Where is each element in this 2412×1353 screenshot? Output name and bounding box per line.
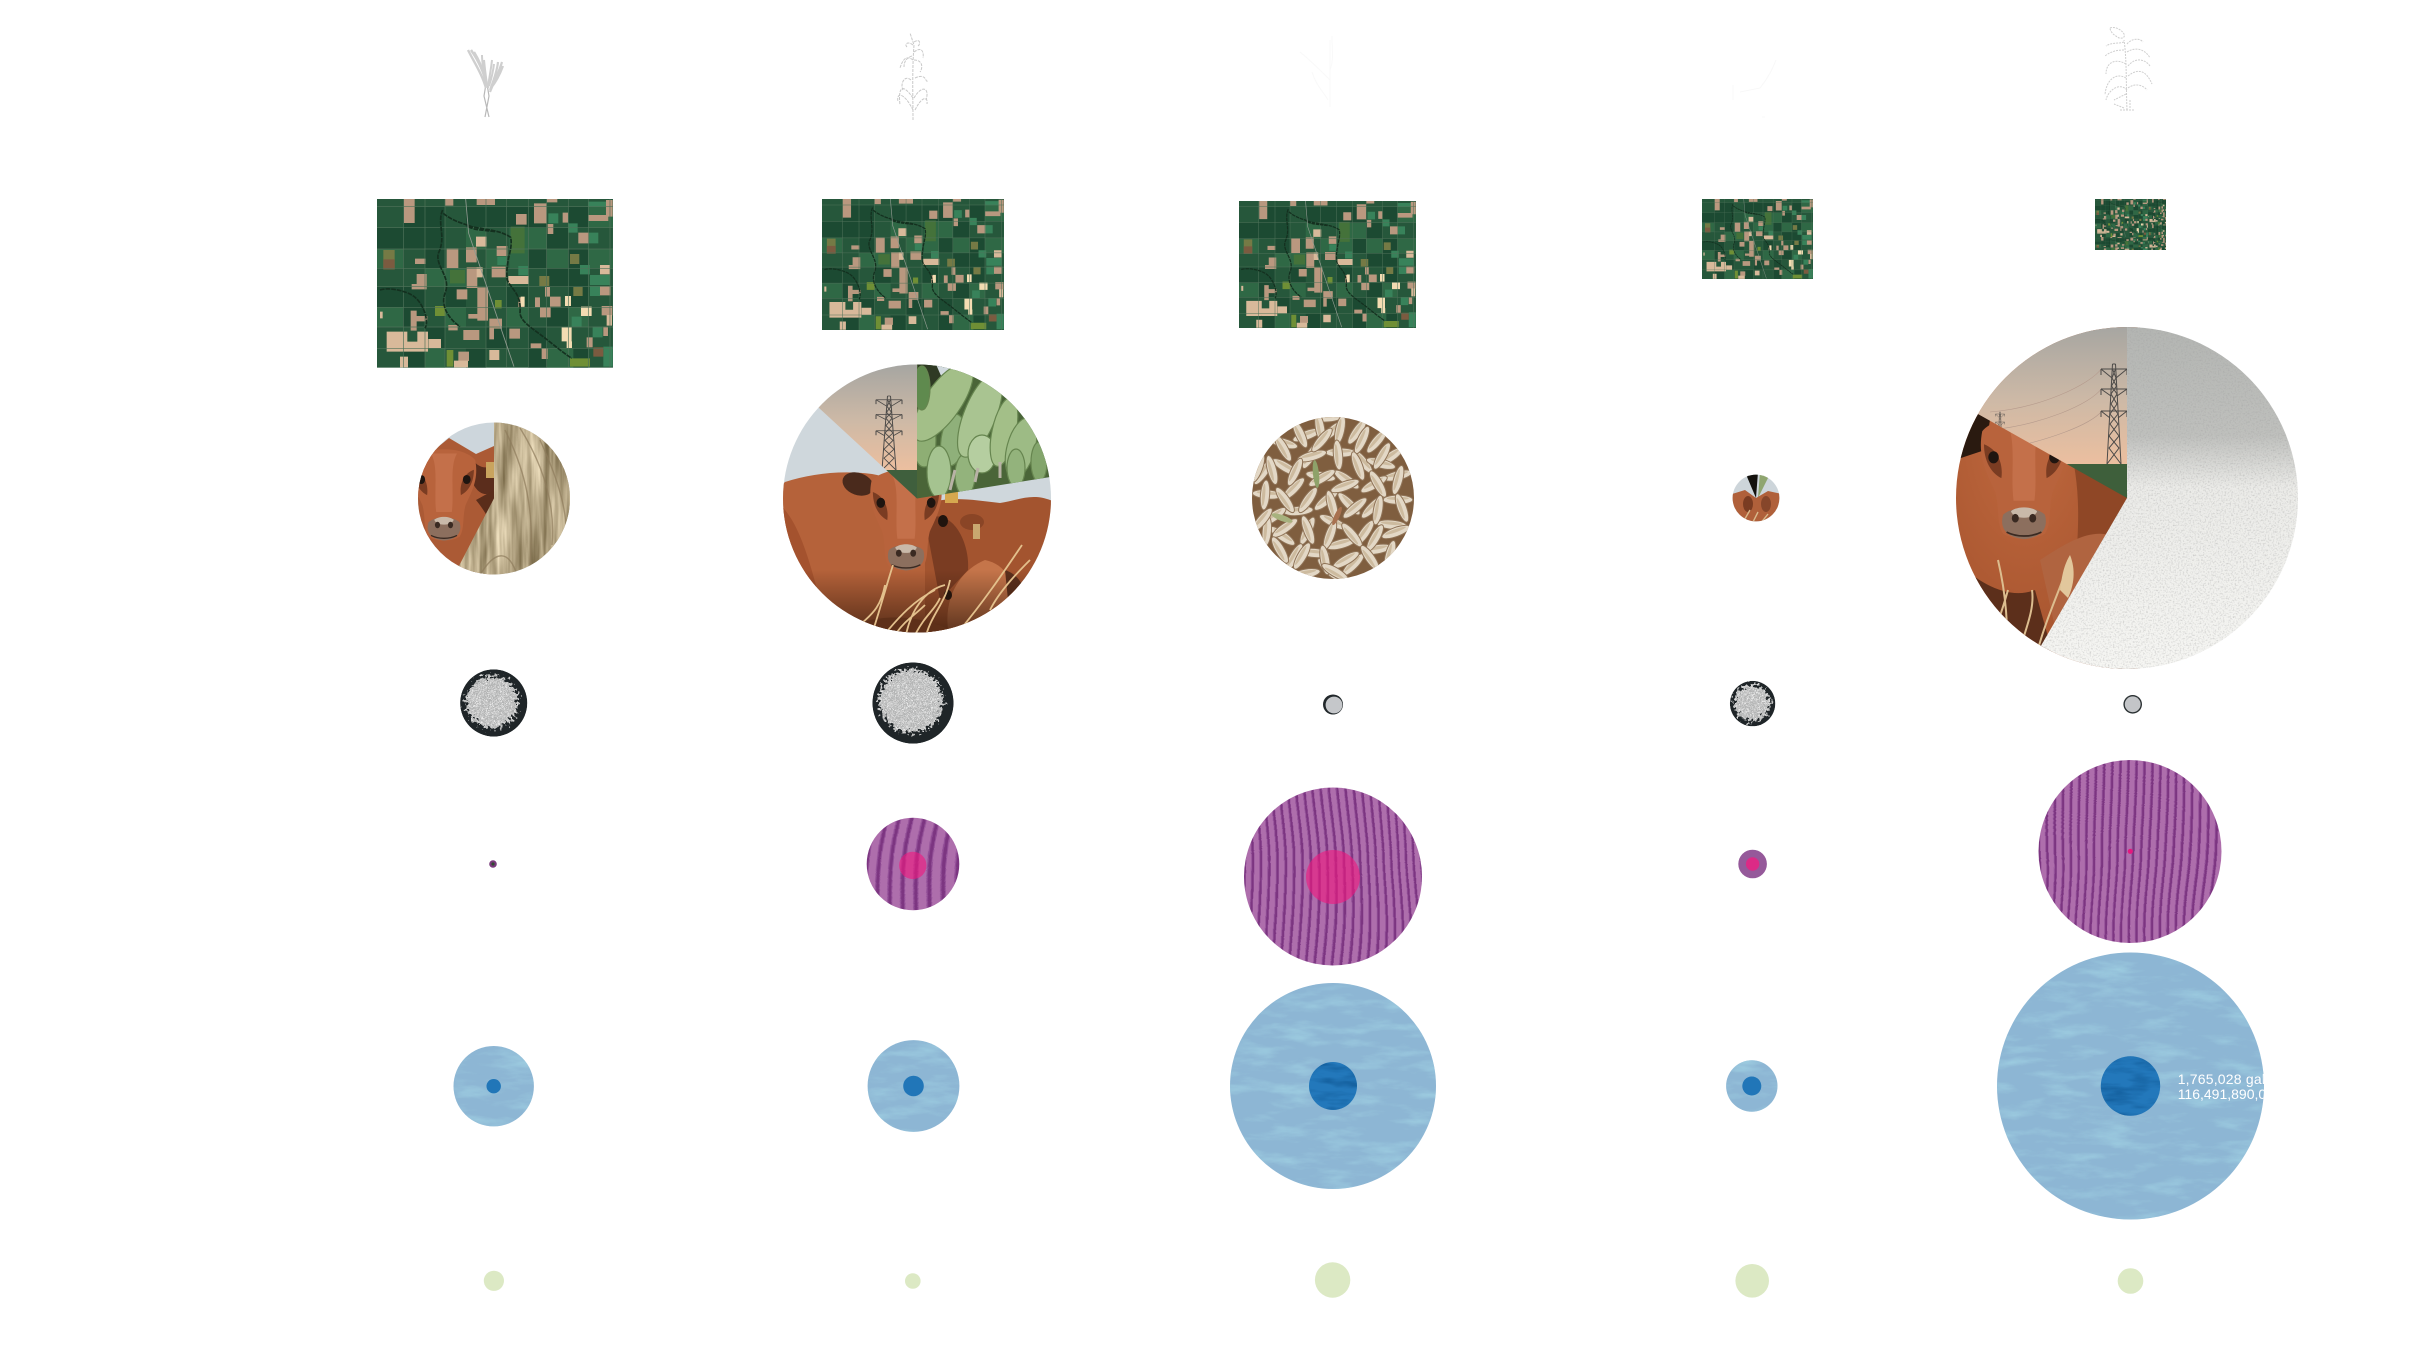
fertilizer pellets: column 5: [2123, 695, 2142, 714]
photo pie: column 2 cattle, power tower and corn: [783, 364, 1051, 632]
pesticide circle: column 3: [1225, 770, 1441, 984]
sugar sector: [2041, 327, 2298, 669]
photo pie: column 4 cattle, tower and corn: [1732, 474, 1780, 522]
satellite land map: column 4: [1702, 199, 1813, 279]
corn sector: [917, 364, 1050, 498]
green dot: column 3: [1315, 1262, 1350, 1298]
pesticide circle: column 4: [1738, 850, 1767, 878]
green dot: column 4: [1735, 1264, 1769, 1298]
gallons label: 116,491,890,0: [2178, 1086, 2266, 1102]
cattle portrait: [1960, 414, 2127, 652]
power tower sector: [1978, 327, 2127, 498]
cattle herd: [783, 472, 1051, 632]
gallons label: [2178, 1071, 2266, 1102]
satellite land map: column 2: [822, 199, 1004, 330]
plant icon: rice: [1300, 36, 1332, 107]
wheat sector: [459, 422, 570, 574]
plant icon: sugarcane: [2105, 27, 2152, 110]
satellite land map: column 5: [2095, 199, 2166, 250]
fertilizer pellets: column 3: [1323, 694, 1343, 714]
plant icon: wheat: [468, 50, 503, 117]
pesticide circle: column 2: [855, 805, 971, 923]
water circle: column 2: [868, 1040, 959, 1132]
fertilizer pellets: column 1: [460, 669, 527, 737]
water circle: column 3: [1230, 983, 1436, 1189]
pesticide circle: column 1: [489, 860, 497, 868]
photo: column 3 rice grains: [1252, 417, 1414, 579]
fertilizer pellets: column 2: [872, 662, 954, 744]
green dot: column 5: [2118, 1268, 2143, 1294]
power tower sector: [818, 364, 917, 498]
satellite land map: column 3: [1239, 201, 1416, 328]
pesticide circle: column 5: [2020, 742, 2240, 962]
green dot: column 1: [484, 1271, 504, 1291]
gallons label: 1,765,028 gal: [2178, 1071, 2265, 1087]
green dot: column 2: [905, 1273, 921, 1289]
plant icon: corn: [898, 33, 928, 120]
fertilizer pellets: column 4: [1730, 681, 1775, 726]
photo pie: column 1 cattle and wheat: [418, 422, 570, 574]
water circle: column 4: [1726, 1060, 1778, 1112]
water circle: column 5 with gallons label: [1997, 952, 2266, 1220]
photo pie: column 5 cattle, power tower and sugar: [1950, 320, 2305, 680]
water circle: column 1: [454, 1046, 534, 1126]
satellite land map: column 1: [377, 199, 613, 368]
plant icon: soybean: [1733, 60, 1776, 117]
